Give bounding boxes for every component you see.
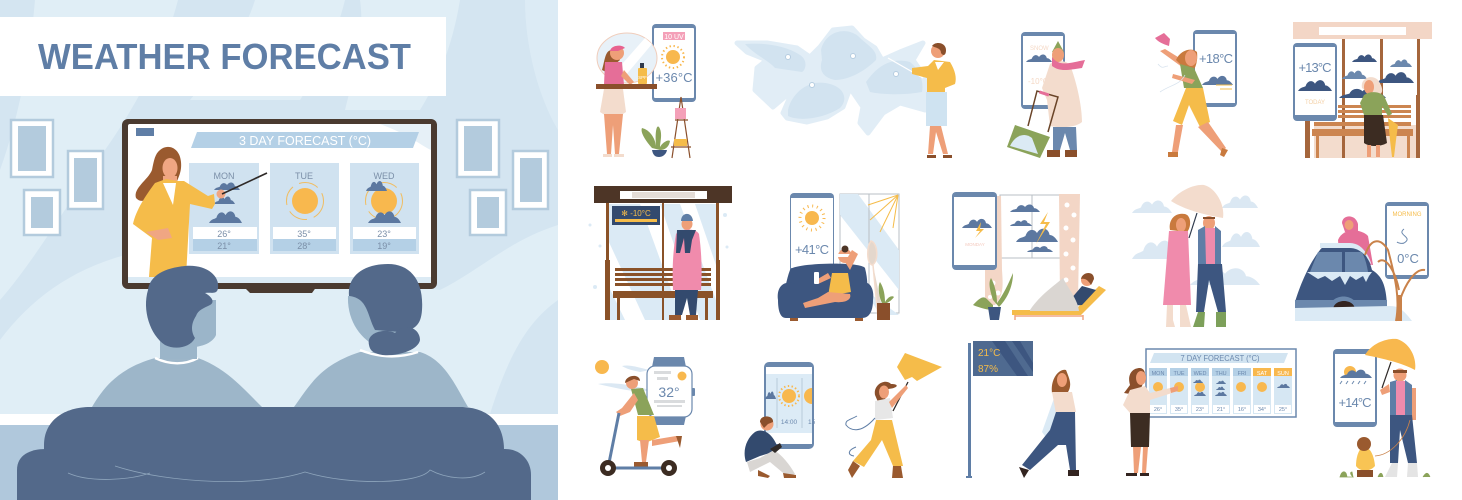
stop sign: -10 degrees: ✻ -10°C <box>621 209 651 218</box>
stop sign: -10 degrees <box>612 206 660 225</box>
board columns: 25° <box>1279 407 1287 413</box>
wall picture frames right <box>457 120 548 235</box>
vignette: windblown umbrella <box>846 353 942 478</box>
vignette: street display and walking woman <box>966 341 1079 478</box>
vignette: scooter and smartwatch <box>595 357 695 476</box>
phone: snow: -10°C <box>1028 77 1049 86</box>
phone: 36 degrees: 10 UV <box>664 34 684 41</box>
phone: 14 degrees: +14°C <box>1338 395 1372 410</box>
board columns: SAT <box>1257 371 1268 377</box>
phone: snow <box>1021 32 1065 109</box>
board columns: FRI <box>1238 371 1247 377</box>
vignette: UV and sunscreen: SPF <box>638 75 647 80</box>
vignette: couple under umbrella <box>1132 185 1260 327</box>
wall picture frames left <box>11 120 103 235</box>
smartwatch: 32 degrees: 32° <box>658 384 680 400</box>
title banner <box>0 17 446 96</box>
board columns: MON <box>1152 371 1164 377</box>
vignette: snow shovel <box>1007 32 1085 158</box>
phone: 18 degrees: +18°C <box>1199 51 1233 66</box>
vignette: man with hourly forecast phone <box>745 362 816 478</box>
forecast card wednesday: 23° <box>377 229 391 239</box>
vignette: heat on sofa <box>778 193 899 321</box>
vignette: frozen car <box>1295 202 1429 321</box>
forecast card monday: 26° <box>217 229 231 239</box>
board columns <box>1149 368 1292 414</box>
vignette: seven day board <box>1123 349 1296 476</box>
forecast header: 3 DAY FORECAST (°C) <box>239 133 371 148</box>
phone: 0 degrees: MORNING <box>1392 212 1422 218</box>
woman viewer from behind <box>294 264 468 407</box>
street display: 87% <box>978 364 998 375</box>
vignette: cold bus stop <box>588 186 732 320</box>
vignette: windy hat <box>1155 30 1237 157</box>
phone: 36 degrees <box>652 24 696 102</box>
map <box>737 28 927 133</box>
street display: 21°C <box>978 348 1000 359</box>
forecast card monday <box>189 163 259 254</box>
phone: 13 degrees <box>1293 43 1337 121</box>
forecast card monday: 21° <box>217 241 231 251</box>
board header <box>1150 353 1288 363</box>
presenter with board <box>1123 368 1178 476</box>
title banner: WEATHER FORECAST <box>38 36 411 77</box>
vignette: UV and sunscreen <box>596 24 696 158</box>
board columns: WED <box>1194 371 1206 377</box>
phone: 0 degrees <box>1385 202 1429 279</box>
presenter <box>133 147 267 277</box>
street display <box>973 341 1033 376</box>
vignette: man walking dog in rain <box>1333 339 1430 477</box>
television <box>122 119 437 293</box>
forecast card tuesday: TUE <box>295 171 313 181</box>
board columns: 35° <box>1175 407 1183 413</box>
forecast card monday: MON <box>214 171 234 181</box>
forecast card tuesday: 35° <box>297 229 311 239</box>
phone: hourly: 15 <box>808 419 816 426</box>
phone: 41 degrees: +41°C <box>795 242 829 257</box>
forecast card wednesday: 19° <box>377 241 391 251</box>
forecast card wednesday: WED <box>374 171 395 181</box>
phone: 13 degrees: TODAY <box>1305 100 1325 106</box>
dog in raincoat <box>1356 437 1375 477</box>
board columns: SUN <box>1277 371 1289 377</box>
phone: hourly <box>764 362 816 449</box>
board columns: 23° <box>1196 407 1204 413</box>
man viewer from behind <box>92 266 262 407</box>
phone: hourly: 14:00 <box>781 419 798 426</box>
board columns: TUE <box>1174 371 1185 377</box>
phone: 0 degrees: 0°C <box>1397 251 1419 266</box>
board header: 7 DAY FORECAST (°C) <box>1180 354 1260 363</box>
curtains <box>985 194 1080 305</box>
forecast card tuesday <box>270 163 339 254</box>
sofa <box>17 407 531 500</box>
forecast card wednesday <box>350 163 419 254</box>
phone: 36 degrees: +36°C <box>656 70 692 85</box>
vignette: bus stop with old woman <box>1293 22 1432 158</box>
board columns: 21° <box>1217 407 1225 413</box>
forecast header <box>191 132 419 148</box>
vignette: storm indoors <box>952 192 1106 320</box>
phone: snow: SNOW <box>1030 46 1049 52</box>
board columns: 26° <box>1154 407 1162 413</box>
board columns: THU <box>1215 371 1227 377</box>
phone: storm <box>952 192 997 270</box>
phone: 13 degrees: +13°C <box>1298 60 1332 75</box>
vignette: woman pointing at map <box>737 28 956 158</box>
forecast card tuesday: 28° <box>297 241 311 251</box>
board columns: 34° <box>1258 407 1266 413</box>
phone: storm: MONDAY <box>965 242 985 247</box>
board columns: 16° <box>1238 407 1246 413</box>
